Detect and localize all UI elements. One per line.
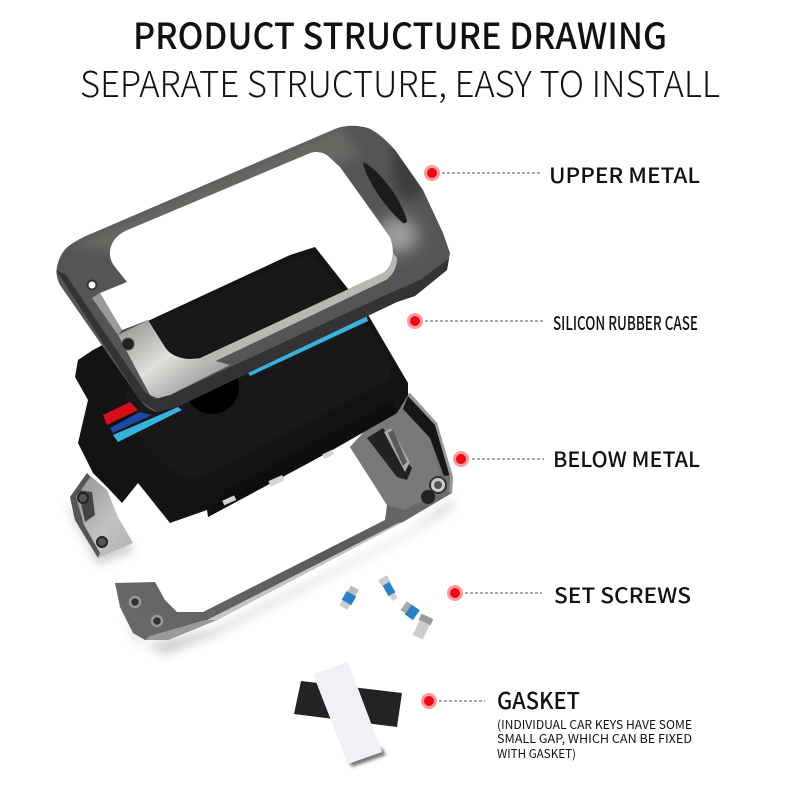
top band shading bbox=[70, 125, 360, 255]
callout: gasket bbox=[421, 682, 692, 762]
silicon rubber case bbox=[75, 247, 408, 523]
callout: upper metal: UPPER METAL bbox=[549, 160, 700, 190]
screw holes bbox=[88, 280, 96, 290]
callout: below metal: BELOW METAL bbox=[553, 444, 700, 474]
left metal fragment bbox=[70, 473, 133, 558]
screw bosses bbox=[421, 490, 435, 504]
button icons bbox=[222, 450, 334, 505]
callout: below metal bbox=[453, 444, 700, 474]
callout: upper metal bbox=[424, 160, 700, 190]
callout: gasket: (INDIVIDUAL CAR KEYS HAVE SOME bbox=[497, 716, 692, 733]
M stripes bbox=[103, 402, 138, 425]
upper metal frame bbox=[50, 120, 460, 420]
callout: gasket: SMALL GAP, WHICH CAN BE FIXED bbox=[497, 730, 692, 747]
outer dark edge bbox=[56, 258, 450, 412]
key blade slot bbox=[367, 428, 412, 480]
bevel highlight bbox=[118, 320, 230, 400]
callout: gasket: GASKET bbox=[497, 682, 580, 716]
callout: silicon rubber case bbox=[407, 309, 698, 336]
right glow bbox=[378, 217, 418, 253]
gasket bbox=[294, 662, 402, 767]
subtitle: SEPARATE STRUCTURE, EASY TO INSTALL bbox=[80, 56, 720, 108]
right and bottom rail bbox=[115, 393, 453, 640]
callout: silicon rubber case: SILICON RUBBER CASE bbox=[553, 309, 698, 336]
callout: set screws: SET SCREWS bbox=[554, 580, 691, 610]
slot bbox=[363, 162, 407, 223]
inner rim bbox=[200, 253, 397, 366]
infographic canvas bbox=[56, 22, 720, 769]
callout: gasket: WITH GASKET) bbox=[497, 745, 576, 762]
lower metal frame bbox=[66, 393, 455, 655]
callout: set screws bbox=[447, 580, 691, 610]
set screws bbox=[339, 575, 433, 640]
title: PRODUCT STRUCTURE DRAWING bbox=[133, 8, 667, 60]
key hole bbox=[185, 360, 239, 414]
